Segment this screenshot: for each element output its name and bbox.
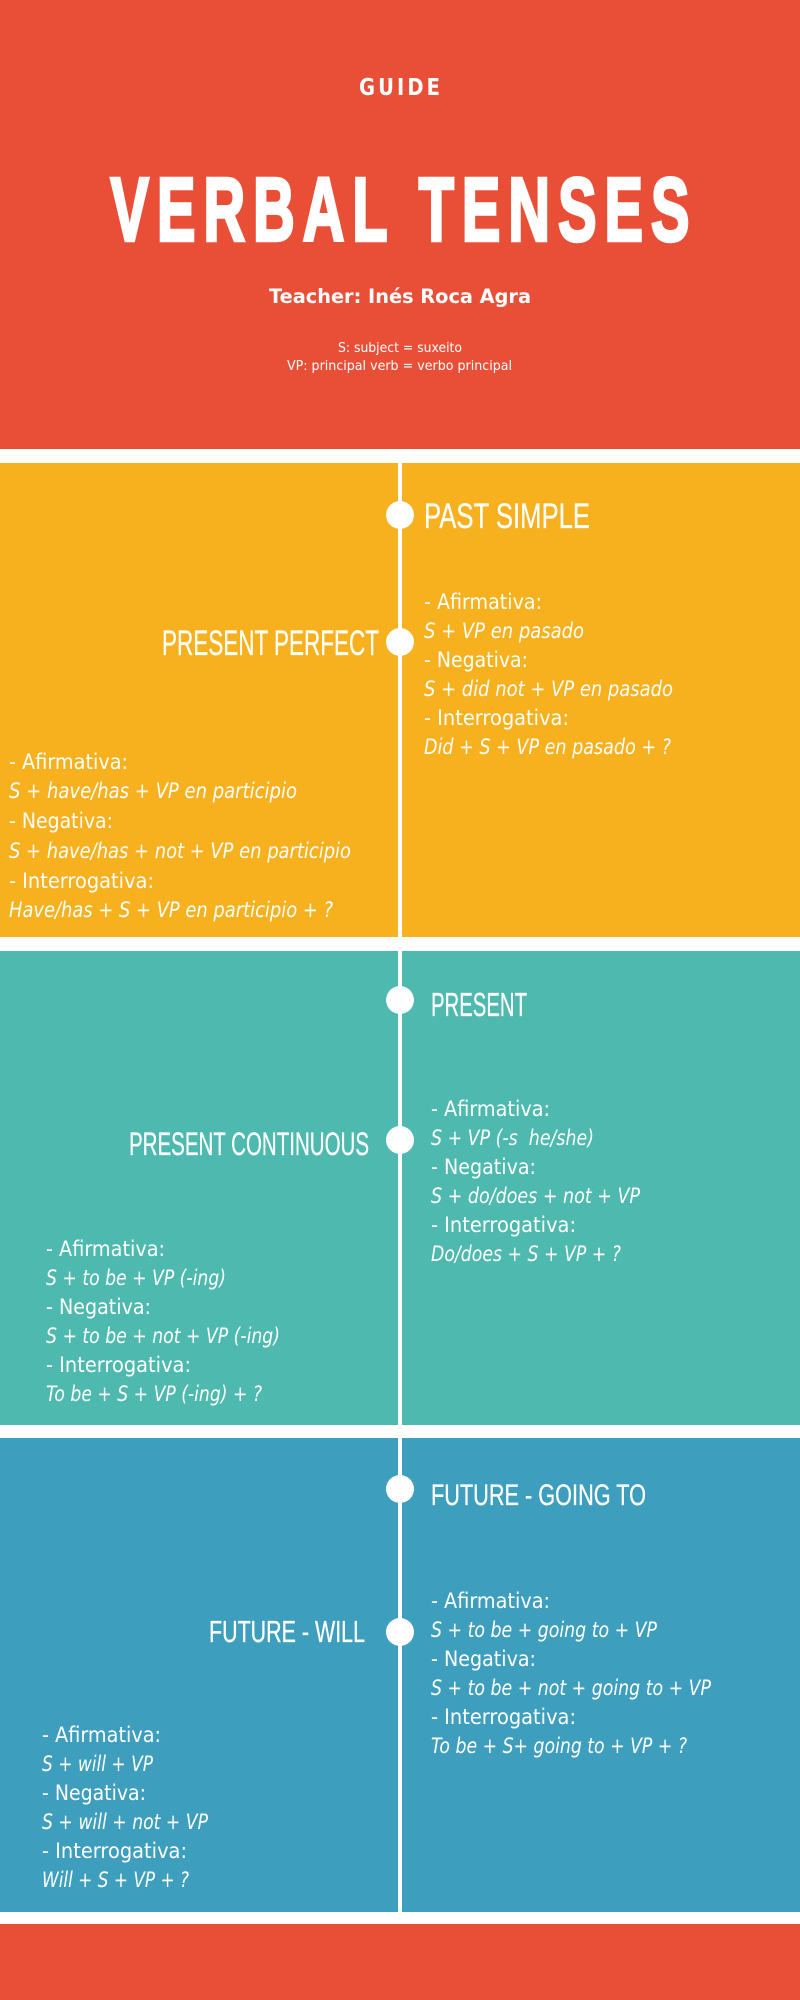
label: guide: GUIDE [359,75,443,101]
text: future will forms: - Afirmativa: [42,1723,161,1748]
text: past simple forms: - Interrogativa: [424,706,569,731]
text: present forms: S + do/does + not + VP [431,1184,640,1209]
panel: yellow background [0,463,800,937]
panel: blue background [0,1438,800,1912]
text: future going to forms [431,1589,711,1759]
text: present perfect forms: - Negativa: [9,809,113,834]
legend: abbreviations: VP: principal verb = verbo principal [287,358,512,374]
heading: future will: FUTURE - WILL [209,1614,365,1649]
text: present continuous forms: - Negativa: [46,1295,151,1320]
text: present continuous forms: S + to be + not + VP (-ing) [46,1324,280,1349]
text: future going to forms: S + to be + going to + VP [431,1618,657,1643]
text: future will forms: - Negativa: [42,1781,146,1806]
text: present continuous forms: - Interrogativa: [46,1353,191,1378]
text: future going to forms: - Negativa: [431,1647,536,1672]
section: present continuous [46,1126,369,1407]
text: past simple forms: - Afirmativa: [424,590,542,615]
text: present perfect forms: Have/has + S + VP en participio + ? [9,898,333,923]
legend: abbreviations: S: subject = suxeito [338,340,462,356]
text: future will forms: - Interrogativa: [42,1839,187,1864]
text: future will forms: Will + S + VP + ? [42,1868,189,1893]
text: future will forms: S + will + VP [42,1752,153,1777]
section: present [431,986,640,1267]
text: present perfect forms [9,750,351,923]
text: present forms: - Interrogativa: [431,1213,576,1238]
text: present forms: - Afirmativa: [431,1097,550,1122]
text: present forms: Do/does + S + VP + ? [431,1242,621,1267]
text: past simple forms: S + did not + VP en pasado [424,677,673,702]
timeline line [398,463,402,1912]
text: present forms [431,1097,640,1267]
panel: footer band [0,1924,800,2000]
text: present perfect forms: S + have/has + VP en participio [9,779,297,804]
title: VERBAL TENSES [110,160,697,260]
text: future going to forms: - Interrogativa: [431,1705,576,1730]
section: present perfect [9,624,379,923]
text: future going to forms: - Afirmativa: [431,1589,550,1614]
text: present continuous forms: S + to be + VP (-ing) [46,1266,226,1291]
timeline dots [386,501,414,1646]
text: present continuous forms [46,1237,280,1407]
panel: teal background [0,951,800,1425]
heading: present: PRESENT [431,986,527,1023]
text: future going to forms: S + to be + not + going to + VP [431,1676,711,1701]
text: past simple forms: S + VP en pasado [424,619,584,644]
text: future going to forms: To be + S+ going to + VP + ? [431,1734,687,1759]
teacher name: Teacher: Inés Roca Agra [269,285,531,308]
section: future going to [431,1479,711,1759]
text: past simple forms: Did + S + VP en pasado + ? [424,735,671,760]
text: present perfect forms: - Afirmativa: [9,750,128,775]
section: past simple [424,497,673,760]
legend: abbreviations [287,340,512,374]
text: present continuous forms: To be + S + VP (-ing) + ? [46,1382,262,1407]
text: past simple forms [424,590,673,760]
text: present forms: - Negativa: [431,1155,536,1180]
heading: present continuous: PRESENT CONTINUOUS [129,1126,369,1162]
text: future will forms [42,1723,208,1893]
text: past simple forms: - Negativa: [424,648,528,673]
text: future will forms: S + will + not + VP [42,1810,208,1835]
text: present perfect forms: - Interrogativa: [9,869,154,894]
text: present continuous forms: - Afirmativa: [46,1237,165,1262]
heading: future going to: FUTURE - GOING TO [431,1479,646,1512]
text: present perfect forms: S + have/has + not + VP en participio [9,839,351,864]
heading: past simple: PAST SIMPLE [424,497,590,536]
text: present forms: S + VP (-s he/she) [431,1126,594,1151]
heading: present perfect: PRESENT PERFECT [162,624,379,663]
panel: header [0,0,800,449]
section: future will [42,1614,365,1893]
